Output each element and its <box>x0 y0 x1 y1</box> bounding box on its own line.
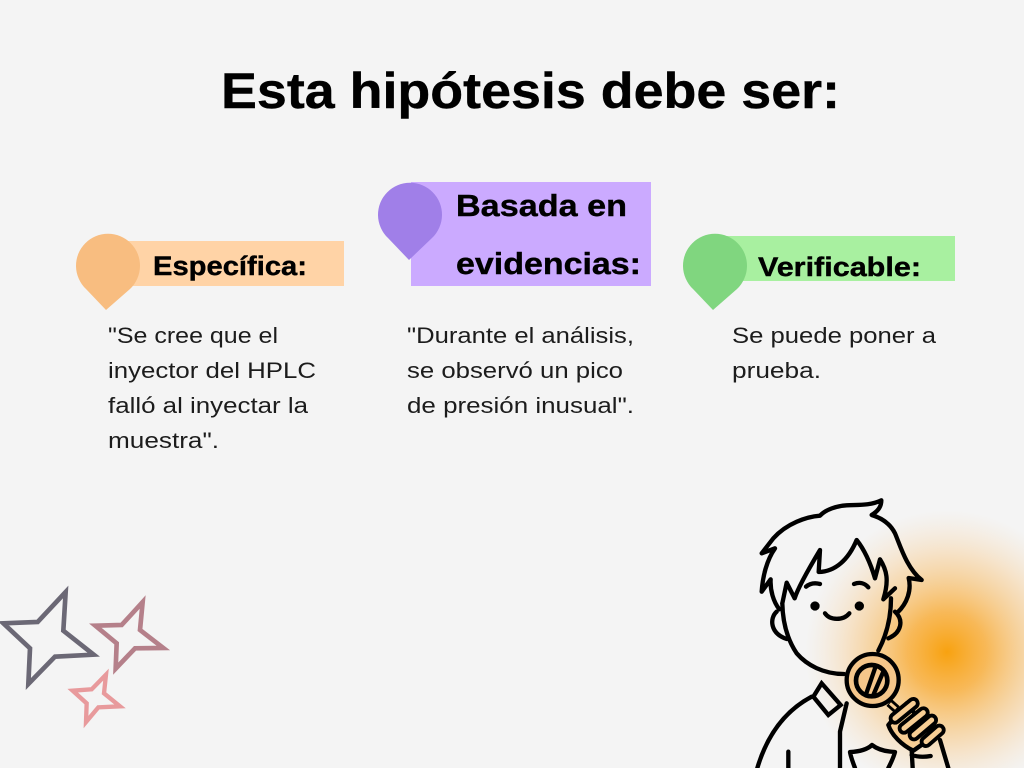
text block: basada en evidencias <box>407 323 634 418</box>
text block: basada en evidencias: de presión inusual". <box>407 393 634 418</box>
icon: purple pin <box>378 183 442 260</box>
text block: verificable: prueba. <box>732 358 821 383</box>
mouth <box>825 613 849 619</box>
icon: stars <box>3 592 163 722</box>
shirt and shoulder <box>757 697 948 768</box>
heading: basada en evidencias: evidencias: <box>456 246 641 281</box>
label bar: específica <box>120 241 344 286</box>
icon: pink star <box>73 675 120 722</box>
text block: basada en evidencias: se observó un pico <box>407 358 623 383</box>
text block: verificable: Se puede poner a <box>732 323 937 348</box>
eyebrows <box>806 583 868 587</box>
eyes <box>810 601 864 611</box>
collar <box>813 683 841 715</box>
heading: específica: Específica: <box>153 251 307 281</box>
text block: específica <box>108 323 316 453</box>
panel: verificable <box>683 234 955 383</box>
heading: verificable: Verificable: <box>758 252 921 282</box>
icon: detective character with magnifying glass <box>757 500 948 768</box>
label bar: verificable <box>725 236 955 281</box>
hair outline <box>762 500 922 613</box>
hand <box>888 703 939 751</box>
hair fringe <box>782 540 895 603</box>
text block: específica: inyector del HPLC <box>108 358 316 383</box>
magnifying glass <box>847 654 899 709</box>
heading: basada en evidencias <box>456 188 641 281</box>
text block: específica: "Se cree que el <box>108 323 278 348</box>
badge <box>850 745 895 768</box>
panel: específica <box>76 234 344 453</box>
title: Esta hipótesis debe ser: <box>221 63 840 119</box>
heading: basada en evidencias: Basada en <box>456 188 627 223</box>
text block: verificable <box>732 323 937 383</box>
icon: green pin <box>683 234 747 310</box>
text block: específica: falló al inyectar la <box>108 393 309 418</box>
label bar: basada en evidencias <box>411 182 651 286</box>
icon: orange pin <box>76 234 140 310</box>
panel: basada en evidencias <box>378 182 651 418</box>
orange glow <box>800 505 1024 768</box>
text block: específica: muestra". <box>108 428 219 453</box>
icon: mauve star <box>95 602 163 669</box>
icon: grey star <box>3 592 94 684</box>
text block: basada en evidencias: "Durante el análisis, <box>407 323 634 348</box>
ears <box>772 612 900 639</box>
face outline <box>782 598 891 674</box>
